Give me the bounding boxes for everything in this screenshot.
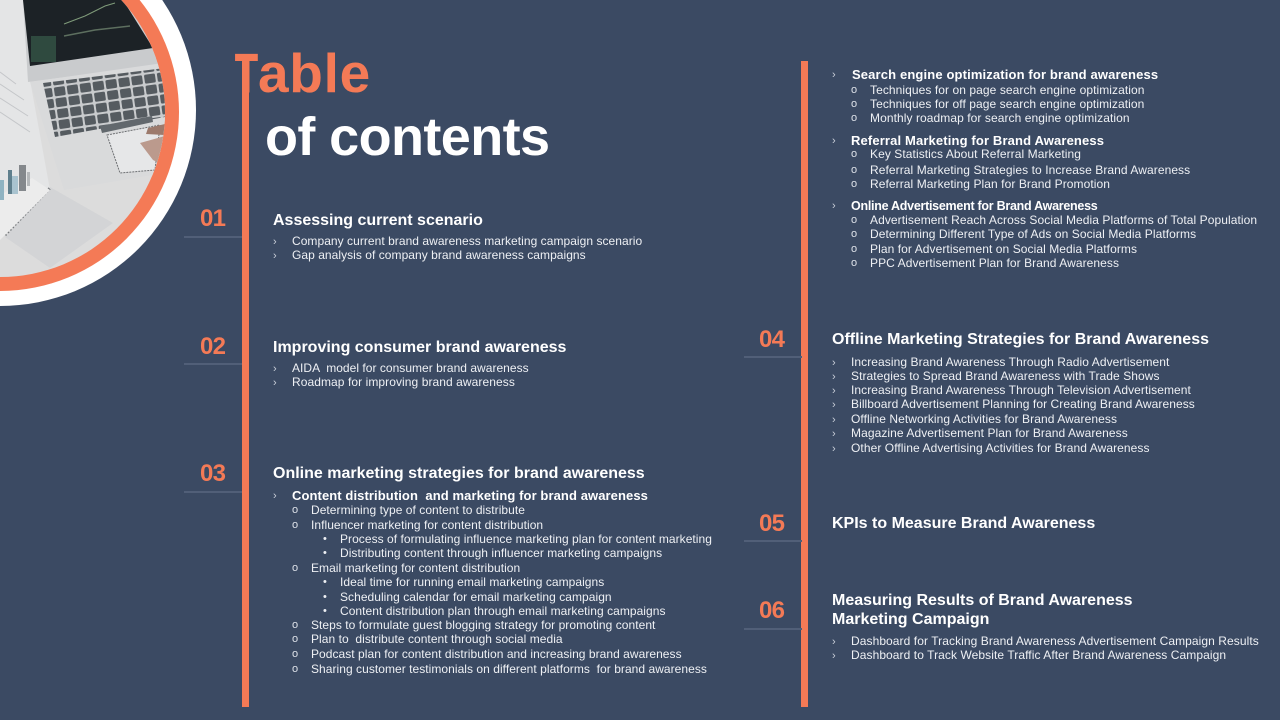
section: continued online marketing sub-items: Referral Marketing for Brand Awareness xyxy=(851,133,1104,148)
section 03: Online marketing strategies for brand awareness: Plan to distribute content through social media xyxy=(311,632,563,646)
section: continued online marketing sub-items: Search engine optimization for brand awareness xyxy=(852,67,1158,82)
section: continued online marketing sub-items: o xyxy=(851,148,857,160)
section 03: Online marketing strategies for brand awareness: Influencer marketing for content distribution xyxy=(311,518,543,532)
section 03: Online marketing strategies for brand awareness: Podcast plan for content distribution and increasing brand awareness xyxy=(311,647,682,661)
section 03: Online marketing strategies for brand awareness: • xyxy=(323,605,327,617)
section 04: Offline Marketing Strategies for Brand Awareness: Other Offline Advertising Activities for Brand Awareness xyxy=(851,441,1150,455)
section 01: Assessing current scenario: › xyxy=(273,250,277,262)
number 02: 02 xyxy=(200,333,225,360)
section: continued online marketing sub-items: Techniques for on page search engine optimization xyxy=(870,83,1145,97)
section 03: Online marketing strategies for brand awareness: o xyxy=(292,663,298,675)
section 05: KPIs to Measure Brand Awareness: KPIs to Measure Brand Awareness xyxy=(832,515,1095,532)
section: continued online marketing sub-items: › xyxy=(832,69,836,81)
section: continued online marketing sub-items xyxy=(832,67,1257,270)
section 03: Online marketing strategies for brand awareness: o xyxy=(292,519,298,531)
section: continued online marketing sub-items: o xyxy=(851,98,857,110)
number 05: 05 xyxy=(759,510,784,537)
section 04: Offline Marketing Strategies for Brand Awareness: Offline Networking Activities for Brand Awareness xyxy=(851,412,1117,426)
section: continued online marketing sub-items: Advertisement Reach Across Social Media Platforms of Total Population xyxy=(870,213,1257,227)
section 03: Online marketing strategies for brand awareness: o xyxy=(292,562,298,574)
section: continued online marketing sub-items: Referral Marketing Plan for Brand Promotion xyxy=(870,177,1110,191)
section: continued online marketing sub-items: › xyxy=(832,200,836,212)
section 03: Online marketing strategies for brand awareness: Distributing content through influencer marketing campaigns xyxy=(340,546,662,560)
section: continued online marketing sub-items: Techniques for off page search engine optimization xyxy=(870,97,1144,111)
section 06: Measuring Results of Brand Awareness Marketing Campaign: Measuring Results of Brand Awareness xyxy=(832,592,1133,609)
section: continued online marketing sub-items: o xyxy=(851,257,857,269)
section 03: Online marketing strategies for brand awareness: › xyxy=(273,490,277,502)
section 03: Online marketing strategies for brand awareness: • xyxy=(323,591,327,603)
section 03: Online marketing strategies for brand awareness: Steps to formulate guest blogging strategy for promoting content xyxy=(311,618,655,632)
section 03: Online marketing strategies for brand awareness: Sharing customer testimonials on different platforms for brand awareness xyxy=(311,662,707,676)
section 03: Online marketing strategies for brand awareness: • xyxy=(323,576,327,588)
section: continued online marketing sub-items: Determining Different Type of Ads on Social Media Platforms xyxy=(870,227,1196,241)
section: continued online marketing sub-items: o xyxy=(851,84,857,96)
section 06: Measuring Results of Brand Awareness Marketing Campaign: › xyxy=(832,650,836,662)
section: continued online marketing sub-items: Plan for Advertisement on Social Media Platforms xyxy=(870,242,1137,256)
section: continued online marketing sub-items: Monthly roadmap for search engine optimization xyxy=(870,111,1130,125)
title line: of contents: of contents xyxy=(265,107,549,167)
section 03: Online marketing strategies for brand awareness: Content distribution plan through email marketing campaigns xyxy=(340,604,666,618)
section 06: Measuring Results of Brand Awareness Marketing Campaign: › xyxy=(832,636,836,648)
section 04: Offline Marketing Strategies for Brand Awareness: › xyxy=(832,385,836,397)
section 03: Online marketing strategies for brand awareness: o xyxy=(292,504,298,516)
section 03: Online marketing strategies for brand awareness: Online marketing strategies for brand awareness xyxy=(273,465,645,482)
section 04: Offline Marketing Strategies for Brand Awareness: Offline Marketing Strategies for Brand Awareness xyxy=(832,331,1209,348)
section 01: Assessing current scenario: Assessing current scenario xyxy=(273,212,483,229)
section 04: Offline Marketing Strategies for Brand Awareness: › xyxy=(832,357,836,369)
section 04: Offline Marketing Strategies for Brand Awareness: › xyxy=(832,371,836,383)
section 03: Online marketing strategies for brand awareness: • xyxy=(323,533,327,545)
section 04: Offline Marketing Strategies for Brand Awareness: › xyxy=(832,414,836,426)
section 02: Improving consumer brand awareness: › xyxy=(273,363,277,375)
section: continued online marketing sub-items: Online Advertisement for Brand Awareness xyxy=(851,199,1097,213)
section: continued online marketing sub-items: › xyxy=(832,135,836,147)
section 03: Online marketing strategies for brand awareness: o xyxy=(292,648,298,660)
section 03: Online marketing strategies for brand awareness: o xyxy=(292,633,298,645)
section 01: Assessing current scenario: › xyxy=(273,236,277,248)
title: Table of contents xyxy=(235,42,549,167)
section 04: Offline Marketing Strategies for Brand Awareness: Magazine Advertisement Plan for Brand Awareness xyxy=(851,426,1128,440)
number 03: 03 xyxy=(200,460,225,487)
section 02: Improving consumer brand awareness xyxy=(273,339,566,389)
title line: Table: T xyxy=(235,42,258,104)
number 06: 06 xyxy=(759,597,784,624)
section 02: Improving consumer brand awareness: Roadmap for improving brand awareness xyxy=(292,375,515,389)
section 04: Offline Marketing Strategies for Brand Awareness: Increasing Brand Awareness Through Television Advertisement xyxy=(851,383,1191,397)
section 03: Online marketing strategies for brand awareness xyxy=(273,465,712,676)
number 01: 01 xyxy=(200,205,225,232)
section 01: Assessing current scenario: Company current brand awareness marketing campaign scenario xyxy=(292,234,642,248)
section 01: Assessing current scenario: Gap analysis of company brand awareness campaigns xyxy=(292,248,586,262)
section 04: Offline Marketing Strategies for Brand Awareness: › xyxy=(832,443,836,455)
section 03: Online marketing strategies for brand awareness: o xyxy=(292,619,298,631)
section 04: Offline Marketing Strategies for Brand Awareness: › xyxy=(832,399,836,411)
number 04: 04 xyxy=(759,326,784,353)
title line: Table: able xyxy=(258,42,371,104)
section 03: Online marketing strategies for brand awareness: Process of formulating influence marketing plan for content marketing xyxy=(340,532,712,546)
left vertical bar xyxy=(242,56,249,707)
right vertical bar xyxy=(801,61,808,707)
section 03: Online marketing strategies for brand awareness: Content distribution and marketing for brand awareness xyxy=(292,488,648,503)
section: continued online marketing sub-items: Key Statistics About Referral Marketing xyxy=(870,147,1081,161)
section: continued online marketing sub-items: o xyxy=(851,178,857,190)
section: continued online marketing sub-items: Referral Marketing Strategies to Increase Brand Awareness xyxy=(870,163,1190,177)
section 03: Online marketing strategies for brand awareness: Email marketing for content distribution xyxy=(311,561,520,575)
section 04: Offline Marketing Strategies for Brand Awareness xyxy=(832,331,1209,455)
section 04: Offline Marketing Strategies for Brand Awareness: › xyxy=(832,428,836,440)
section 03: Online marketing strategies for brand awareness: Scheduling calendar for email marketing campaign xyxy=(340,590,612,604)
section 06: Measuring Results of Brand Awareness Marketing Campaign xyxy=(832,592,1259,662)
section: continued online marketing sub-items: PPC Advertisement Plan for Brand Awareness xyxy=(870,256,1119,270)
section: continued online marketing sub-items: o xyxy=(851,112,857,124)
section 04: Offline Marketing Strategies for Brand Awareness: Billboard Advertisement Planning for Creating Brand Awareness xyxy=(851,397,1195,411)
section 02: Improving consumer brand awareness: Improving consumer brand awareness xyxy=(273,339,566,356)
section: continued online marketing sub-items: o xyxy=(851,214,857,226)
photo: laptop in circular frame xyxy=(0,0,196,306)
section 03: Online marketing strategies for brand awareness: • xyxy=(323,547,327,559)
section 06: Measuring Results of Brand Awareness Marketing Campaign: Dashboard for Tracking Brand Awareness Advertisement Campaign Results xyxy=(851,634,1259,648)
section 06: Measuring Results of Brand Awareness Marketing Campaign: Marketing Campaign xyxy=(832,611,989,628)
section 03: Online marketing strategies for brand awareness: Determining type of content to distribute xyxy=(311,503,525,517)
section 03: Online marketing strategies for brand awareness: Ideal time for running email marketing campaigns xyxy=(340,575,604,589)
section: continued online marketing sub-items: o xyxy=(851,243,857,255)
section: continued online marketing sub-items: o xyxy=(851,164,857,176)
section 06: Measuring Results of Brand Awareness Marketing Campaign: Dashboard to Track Website Traffic After Brand Awareness Campaign xyxy=(851,648,1226,662)
section 04: Offline Marketing Strategies for Brand Awareness: Strategies to Spread Brand Awareness with Trade Shows xyxy=(851,369,1160,383)
section 04: Offline Marketing Strategies for Brand Awareness: Increasing Brand Awareness Through Radio Advertisement xyxy=(851,355,1169,369)
section 01: Assessing current scenario xyxy=(273,212,642,262)
section: continued online marketing sub-items: o xyxy=(851,228,857,240)
section 02: Improving consumer brand awareness: › xyxy=(273,377,277,389)
section 02: Improving consumer brand awareness: AIDA model for consumer brand awareness xyxy=(292,361,529,375)
